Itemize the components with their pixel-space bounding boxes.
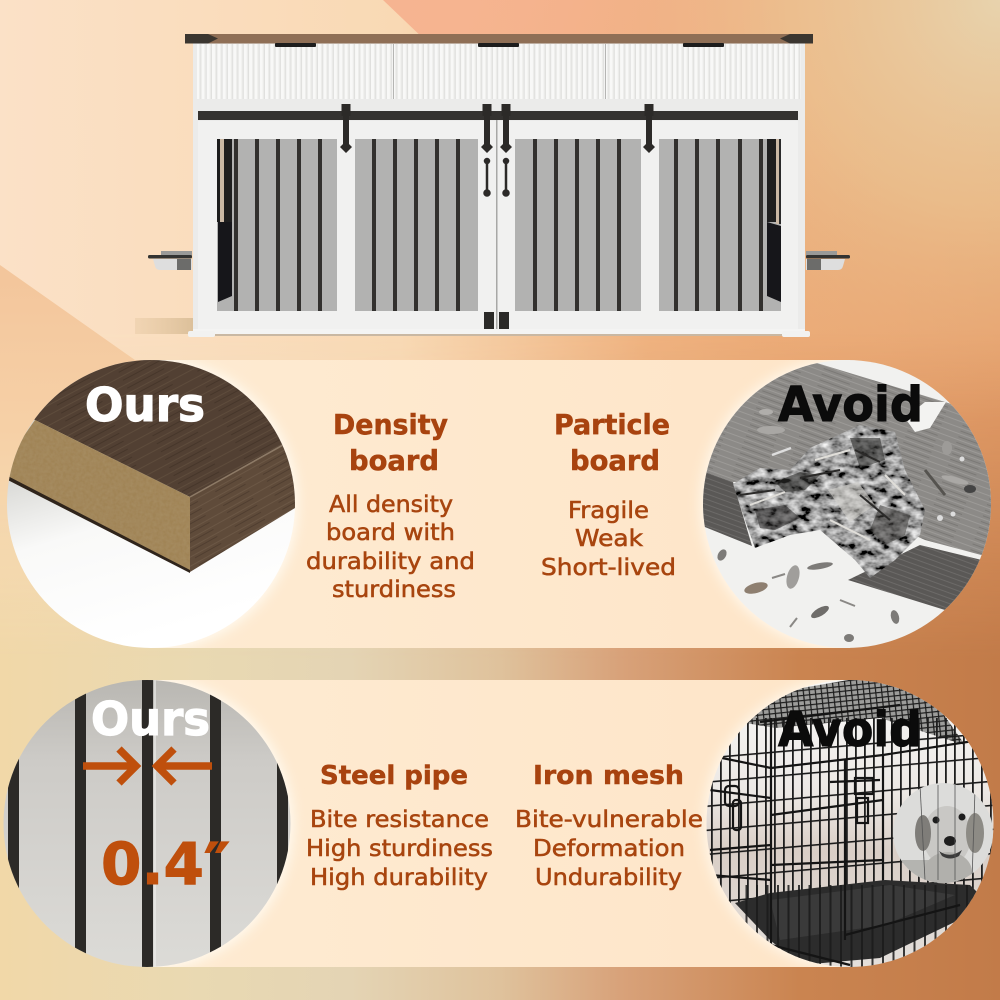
heading: particle board — [554, 408, 670, 477]
text: steel pipe benefits: High sturdiness — [306, 836, 493, 862]
window left — [217, 139, 337, 311]
text: iron mesh drawbacks: Undurability — [535, 865, 682, 891]
heading: steel pipe: Steel pipe — [320, 761, 468, 791]
text: particle board drawbacks: Weak — [575, 526, 644, 552]
panel background band — [150, 680, 850, 967]
cage wires — [710, 705, 980, 965]
door frames — [198, 121, 798, 329]
heading: particle board: board — [570, 444, 660, 477]
photo: iron mesh cage, avoid — [700, 675, 1000, 970]
inset photo: golden retriever — [893, 783, 993, 892]
arrow: pointing left — [157, 749, 212, 783]
panel background band — [150, 360, 850, 648]
heading: particle board: Particle — [554, 408, 670, 441]
text: steel pipe benefits — [306, 807, 493, 891]
panel: density board vs particle board — [0, 350, 1000, 655]
text: density board benefits: board with — [326, 520, 455, 546]
window centre right — [515, 139, 641, 311]
photo: broken particle board, avoid — [700, 357, 1000, 653]
centre door seam — [496, 120, 498, 332]
photo: steel pipe bars, ours — [0, 677, 295, 970]
text: steel pipe benefits: Bite resistance — [310, 807, 489, 833]
text: density board benefits: All density — [329, 492, 453, 518]
text: iron mesh drawbacks — [515, 807, 703, 891]
panel: steel pipe vs iron mesh — [0, 675, 1000, 970]
label: avoid: Avoid — [778, 377, 923, 433]
left food bowl — [148, 251, 192, 270]
text: iron mesh drawbacks: Bite-vulnerable — [515, 807, 703, 833]
floor shadow — [135, 318, 193, 334]
text: particle board drawbacks: Fragile — [568, 498, 649, 524]
text: steel pipe benefits: High durability — [310, 865, 488, 891]
text: density board benefits — [306, 492, 475, 603]
cabinet body — [193, 43, 805, 331]
right food bowl — [806, 251, 850, 270]
sliding barn door rail — [198, 111, 798, 120]
door latches — [484, 312, 509, 334]
heading: density board: board — [349, 444, 439, 477]
heading: density board — [333, 408, 448, 477]
floor tray — [735, 880, 990, 965]
flying chips — [716, 409, 976, 642]
debris mass — [733, 425, 925, 578]
window centre left — [355, 139, 478, 311]
text: density board benefits: durability and — [306, 549, 475, 575]
heading: density board: Density — [333, 408, 448, 441]
text: particle board drawbacks: Short-lived — [541, 555, 676, 581]
arrow: pointing right — [83, 749, 136, 783]
door handles — [484, 159, 508, 196]
label: avoid: Avoid — [778, 702, 922, 758]
text: iron mesh drawbacks: Deformation — [533, 836, 685, 862]
rail hangers — [340, 104, 655, 153]
label: ours: Ours — [85, 378, 205, 432]
label: ours: Ours — [91, 692, 210, 746]
base plinth — [188, 329, 810, 337]
photo: density board, ours — [0, 350, 300, 655]
text: particle board drawbacks — [541, 498, 676, 581]
text: density board benefits: sturdiness — [332, 577, 456, 603]
product: white double dog crate furniture — [135, 34, 850, 337]
cage top — [740, 678, 965, 745]
wooden top — [185, 34, 813, 44]
cage front mesh — [705, 718, 1000, 903]
label: gap measurement: 0.4″ — [101, 830, 230, 898]
drawers — [197, 43, 801, 99]
heading: iron mesh: Iron mesh — [533, 761, 684, 791]
window right — [659, 139, 781, 311]
